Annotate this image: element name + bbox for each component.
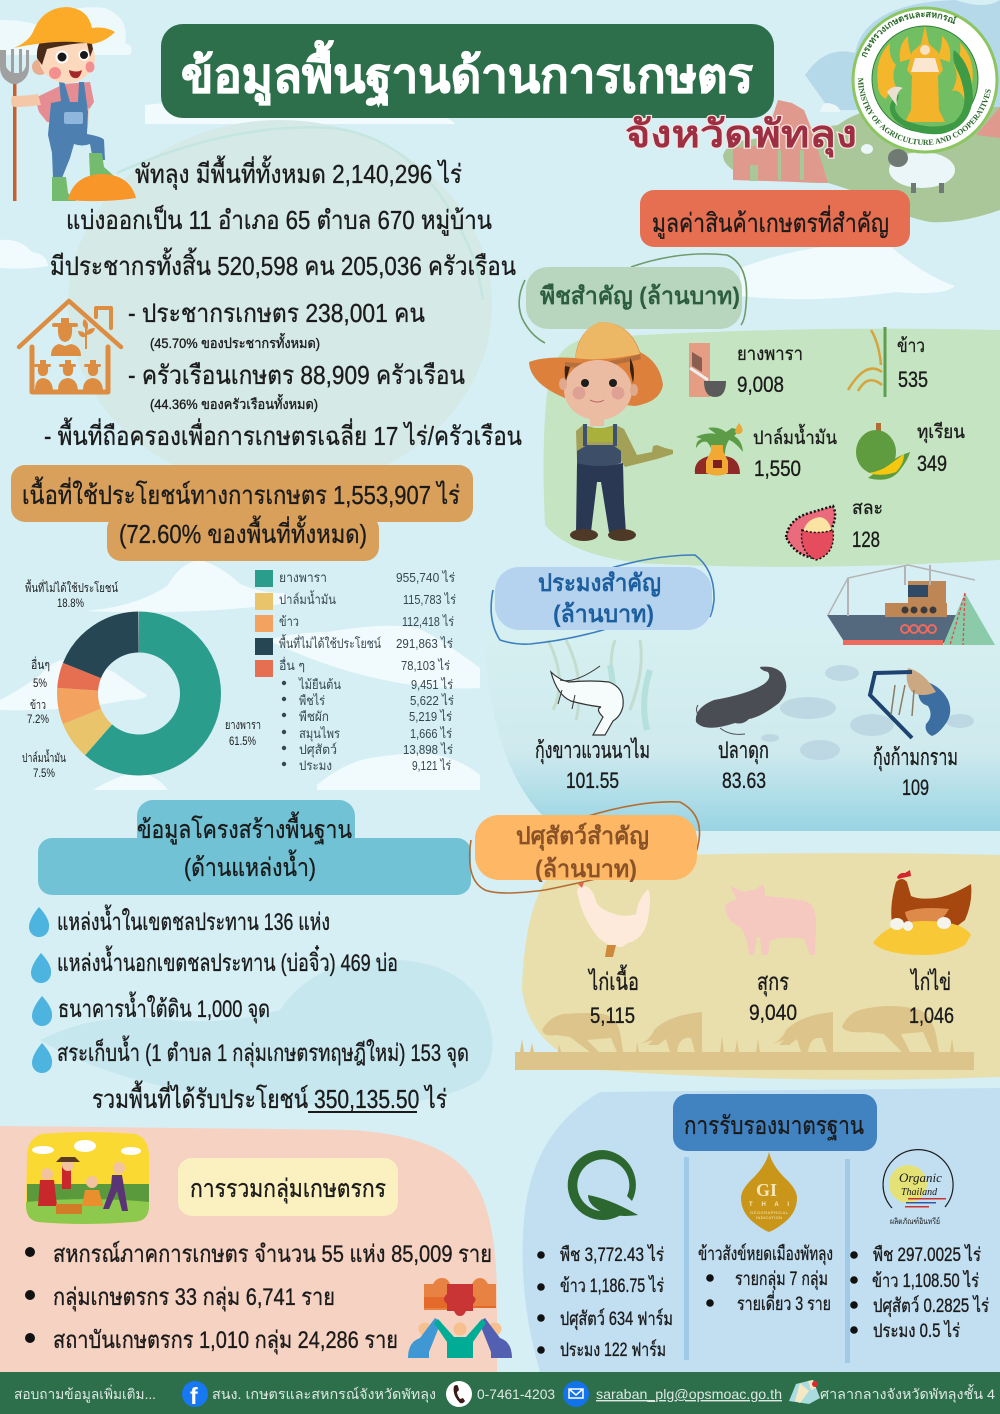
- title banner: ข้อมูลพื้นฐานด้านการเกษตร: [181, 40, 753, 107]
- heading: certifications: การรับรองมาตรฐาน: [684, 1112, 864, 1140]
- illustration: farm hill with barn and sheep: [723, 0, 1000, 222]
- list: Q standard: ปศุสัตว์ 634 ฟาร์ม: [560, 1308, 673, 1331]
- legend: land use: 5,622 ไร่: [410, 693, 454, 708]
- footer: saraban_plg@opsmoac.go.th: [596, 1386, 782, 1402]
- legend: land use: ยางพารา: [279, 570, 327, 585]
- fish: white shrimp: 101.55: [566, 768, 619, 793]
- logo: Q mark: [568, 1150, 638, 1220]
- fish: catfish: ปลาดุก: [718, 737, 769, 764]
- donut chart: land use: อื่นๆ: [31, 656, 50, 672]
- donut chart: land use: 18.8%: [57, 596, 84, 610]
- water total benefit area: รวมพื้นที่ได้รับประโยชน์ 350,135.50 ไร่: [92, 1080, 447, 1114]
- livestock: laying hen: [873, 870, 971, 1028]
- heading: water infrastructure: [38, 800, 471, 895]
- livestock: pig: 9,040: [749, 1000, 797, 1025]
- farmer with pitchfork: [0, 7, 136, 201]
- logo: GI Thai: GI: [756, 1180, 777, 1200]
- legend: land use: 112,418 ไร่: [402, 614, 454, 629]
- farmer population statistics: - ครัวเรือนเกษตร 88,909 ครัวเรือน: [128, 360, 465, 390]
- legend: land use: พืชผัก: [299, 709, 329, 724]
- dividers: [684, 1157, 850, 1363]
- crop: rice: ข้าว: [897, 336, 925, 357]
- heading: key commodity value: [640, 190, 910, 247]
- donut chart: land use: 5%: [33, 676, 47, 690]
- pale green hill behind intro text: [68, 120, 492, 490]
- list: Q standard: พืช 3,772.43 ไร่: [560, 1244, 664, 1266]
- heading: key commodity value: มูลค่าสินค้าเกษตรที่สำคัญ: [652, 205, 889, 239]
- crop: oil palm: ปาล์มน้ำมัน: [753, 424, 837, 449]
- icon: farmer family house: [19, 301, 121, 392]
- heading: certifications: [673, 1094, 877, 1151]
- illustration: farmer family group: [26, 1132, 149, 1224]
- farmer groups list: สถาบันเกษตรกร 1,010 กลุ่ม 24,286 ราย: [53, 1327, 398, 1355]
- legend: land use: 291,863 ไร่: [396, 636, 453, 651]
- heading: key fisheries: (ล้านบาท): [553, 601, 654, 628]
- panel: farmer groups: [0, 1126, 497, 1372]
- list: Q standard: ข้าว 1,186.75 ไร่: [560, 1275, 664, 1297]
- heading: key crops: พืชสำคัญ (ล้านบาท): [540, 283, 740, 310]
- legend: land use: [255, 570, 456, 773]
- legend: land use: 115,783 ไร่: [403, 592, 456, 607]
- crop: rubber: 9,008: [737, 372, 784, 397]
- fish: catfish: 83.63: [722, 768, 766, 793]
- logo: GI Thai: GEOGRAPHICAL: [750, 1210, 789, 1215]
- legend: land use: 1,666 ไร่: [410, 726, 452, 741]
- heading: water infrastructure: (ด้านแหล่งน้ำ): [184, 849, 316, 882]
- water items list: [29, 904, 469, 1073]
- livestock: laying hen: ไก่ไข่: [910, 968, 951, 996]
- heading: key livestock: (ล้านบาท): [535, 856, 637, 883]
- crop: rice: [848, 327, 928, 397]
- donut chart: land use: 61.5%: [229, 734, 256, 748]
- logo: Organic Thailand: ผลิตภัณฑ์อินทรีย์: [890, 1216, 940, 1226]
- heading: agricultural land: เนื้อที่ใช้ประโยชน์ทางการเกษตร 1,553,907 ไร่: [22, 476, 460, 510]
- livestock: broiler chicken: 5,115: [590, 1003, 635, 1028]
- crop: oil palm: 1,550: [754, 456, 801, 481]
- fish: giant prawn: 109: [902, 775, 929, 800]
- title banner: [161, 24, 774, 118]
- list: organic: [850, 1244, 989, 1342]
- donut chart: land use: ยางพารา: [225, 718, 261, 732]
- crop: durian: 349: [917, 451, 947, 476]
- crop: rubber: [689, 343, 803, 397]
- intro text block: พัทลุง มีพื้นที่ทั้งหมด 2,140,296 ไร่: [135, 155, 462, 190]
- crop: durian: ทุเรียน: [917, 421, 965, 444]
- list: organic: ประมง 0.5 ไร่: [873, 1320, 960, 1342]
- farmer groups list: [25, 1240, 492, 1355]
- heading: key crops: [519, 254, 747, 343]
- crop: rubber: ยางพารา: [737, 344, 803, 365]
- icon: teamwork puzzle: [408, 1278, 512, 1358]
- donut chart: land use: 7.2%: [27, 712, 49, 726]
- illustration: fishing boat: [827, 565, 995, 645]
- legend: land use: พื้นที่ไม่ได้ใช้ประโยชน์: [279, 634, 381, 651]
- logo: GI Thai: T H A I: [749, 1202, 789, 1208]
- fish: giant prawn: [870, 668, 958, 800]
- fish: white shrimp: [535, 666, 650, 793]
- legend: land use: 13,898 ไร่: [403, 742, 453, 757]
- panel: crops: [544, 329, 1000, 567]
- donut chart: land use: พื้นที่ไม่ได้ใช้ประโยชน์: [25, 579, 118, 595]
- crop: oil palm: [695, 423, 837, 481]
- livestock: laying hen: 1,046: [909, 1003, 954, 1028]
- farmer groups list: สหกรณ์ภาคการเกษตร จำนวน 55 แห่ง 85,009 ราย: [53, 1240, 492, 1268]
- farmer population statistics: [44, 298, 522, 451]
- heading: key fisheries: [491, 555, 714, 644]
- footer: สนง. เกษตรและสหกรณ์จังหวัดพัทลุง: [212, 1386, 436, 1403]
- crop: rice: 535: [898, 367, 928, 392]
- heading: key fisheries: ประมงสำคัญ: [538, 570, 661, 597]
- list: Q standard: ประมง 122 ฟาร์ม: [560, 1339, 666, 1361]
- fish: catfish: [696, 667, 786, 793]
- crop: salacca: สละ: [852, 498, 883, 519]
- crop: durian: [856, 421, 965, 480]
- intro text block: [50, 155, 516, 281]
- intro text block: แบ่งออกเป็น 11 อำเภอ 65 ตำบล 670 หมู่บ้าน: [66, 204, 492, 236]
- legend: land use: อื่น ๆ: [279, 657, 305, 673]
- livestock: broiler chicken: [577, 882, 650, 1028]
- heading: farmer groups: การรวมกลุ่มเกษตรกร: [190, 1175, 386, 1204]
- footer: f: [190, 1383, 198, 1409]
- farmer population statistics: (45.70% ของประชากรทั้งหมด): [150, 333, 320, 351]
- donut chart: land use: ปาล์มน้ำมัน: [22, 749, 66, 765]
- heading: key livestock: [470, 802, 700, 893]
- water items list: แหล่งน้ำนอกเขตชลประทาน (บ่อจิ๋ว) 469 บ่อ: [57, 945, 398, 977]
- legend: land use: ข้าว: [279, 614, 299, 629]
- footer: [0, 1372, 1000, 1414]
- list: GI rice: รายเดี่ยว 3 ราย: [737, 1290, 831, 1315]
- background clouds: [0, 7, 955, 790]
- water items list: แหล่งน้ำในเขตชลประทาน 136 แห่ง: [57, 904, 330, 936]
- panel: certifications: [523, 1088, 1000, 1372]
- livestock: pig: [725, 884, 816, 1025]
- donut chart: land use: ข้าว: [30, 698, 46, 712]
- heading: agricultural land: [11, 465, 473, 561]
- legend: land use: ไม้ยืนต้น: [298, 677, 341, 692]
- panel: livestock: [522, 853, 1000, 1080]
- footer: สอบถามข้อมูลเพิ่มเติม...: [14, 1385, 156, 1403]
- heading: key livestock: ปศุสัตว์สำคัญ: [516, 822, 649, 852]
- water puddle background: [40, 960, 492, 1106]
- logo: Organic Thailand: Organic: [899, 1170, 942, 1185]
- legend: land use: 955,740 ไร่: [396, 570, 455, 585]
- list: GI rice: [698, 1243, 833, 1315]
- background: cattle silhouettes and ground: [515, 1006, 974, 1070]
- subtitle: province: จังหวัดพัทลุง: [625, 114, 857, 158]
- logo: GI Thai: INDICATION: [756, 1215, 782, 1220]
- list: GI rice: รายกลุ่ม 7 กลุ่ม: [735, 1269, 828, 1291]
- legend: land use: 5,219 ไร่: [409, 709, 452, 724]
- fish: giant prawn: กุ้งก้ามกราม: [873, 744, 958, 771]
- livestock: pig: สุกร: [757, 969, 789, 997]
- livestock: broiler chicken: ไก่เนื้อ: [587, 964, 639, 996]
- logo: GI Thai: [741, 1152, 797, 1232]
- logo: ministry of agriculture seal: [852, 6, 998, 154]
- list: Q standard: [537, 1244, 673, 1361]
- farmer with straw hat presenting: [529, 322, 673, 541]
- crop: salacca: [786, 498, 883, 560]
- farmer population statistics: - พื้นที่ถือครองเพื่อการเกษตรเฉลี่ย 17 ไร่/ครัวเรือน: [44, 417, 522, 451]
- logo: Organic Thailand: Thailand: [901, 1187, 938, 1198]
- crop: salacca: 128: [852, 527, 880, 552]
- farmer population statistics: (44.36% ของครัวเรือนทั้งหมด): [150, 394, 318, 412]
- legend: land use: ปาล์มน้ำมัน: [279, 590, 336, 607]
- legend: land use: พืชไร่: [299, 693, 325, 708]
- background seaweed and fish: [548, 640, 974, 760]
- legend: land use: ปศุสัตว์: [299, 742, 337, 758]
- legend: land use: 78,103 ไร่: [401, 658, 450, 673]
- heading: water infrastructure: ข้อมูลโครงสร้างพื้นฐาน: [137, 811, 352, 845]
- intro text block: มีประชากรทั้งสิ้น 520,598 คน 205,036 ครัวเรือน: [50, 247, 516, 281]
- logo: ministry of agriculture seal: MINISTRY OF AGRICULTURE AND COOPERATIVES: [858, 78, 991, 145]
- heading: agricultural land: (72.60% ของพื้นที่ทั้งหมด): [119, 515, 367, 549]
- logo: Organic Thailand: [883, 1150, 953, 1226]
- water items list: ธนาคารน้ำใต้ดิน 1,000 จุด: [58, 991, 270, 1024]
- water items list: สระเก็บน้ำ (1 ตำบล 1 กลุ่มเกษตรทฤษฎีใหม่) 153 จุด: [57, 1035, 469, 1068]
- footer: ศาลากลางจังหวัดพัทลุงชั้น 4: [820, 1384, 995, 1403]
- list: GI rice: ข้าวสังข์หยดเมืองพัทลุง: [698, 1243, 833, 1266]
- logo: ministry of agriculture seal: กระทรวงเกษตรและสหกรณ์: [862, 12, 958, 58]
- footer: 0-7461-4203: [477, 1386, 555, 1402]
- donut chart: land use: [22, 579, 261, 780]
- legend: land use: 9,121 ไร่: [412, 758, 451, 773]
- farmer population statistics: - ประชากรเกษตร 238,001 คน: [128, 298, 425, 328]
- legend: land use: สมุนไพร: [299, 726, 340, 742]
- panel: fisheries: [484, 630, 1000, 831]
- fish: white shrimp: กุ้งขาวแวนนาไม: [535, 737, 650, 764]
- heading: farmer groups: [178, 1158, 398, 1216]
- farmer groups list: กลุ่มเกษตรกร 33 กลุ่ม 6,741 ราย: [53, 1284, 335, 1312]
- legend: land use: ประมง: [299, 758, 332, 773]
- legend: land use: 9,451 ไร่: [411, 677, 453, 692]
- donut chart: land use: 7.5%: [33, 766, 55, 780]
